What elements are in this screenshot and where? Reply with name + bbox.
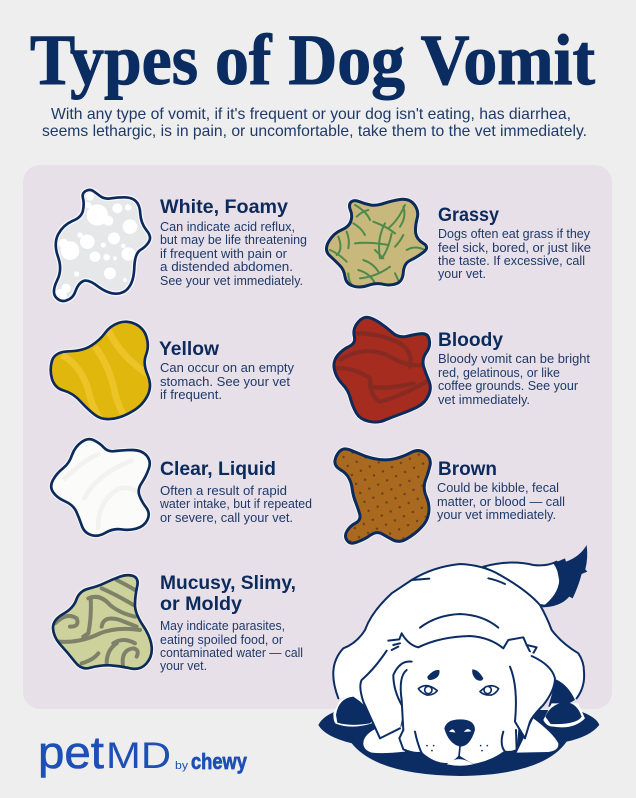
- heading: or Moldy: [160, 593, 242, 615]
- description: vet immediately.: [438, 392, 530, 407]
- description: [437, 480, 565, 522]
- item: grassy: [326, 199, 591, 287]
- description: Often a result of rapid: [160, 483, 287, 498]
- title: Types of Dog Vomit: [30, 20, 595, 100]
- left ear lines: [360, 651, 412, 738]
- heading: Yellow: [159, 338, 220, 360]
- item: brown: [335, 449, 565, 543]
- description: Can occur on an empty: [160, 360, 294, 375]
- front paws: [363, 718, 558, 753]
- nose and mouth: [444, 719, 475, 766]
- tail: [483, 545, 587, 607]
- description: eating spoiled food, or: [160, 632, 284, 647]
- heading: Clear, Liquid: [160, 458, 276, 480]
- heading: Mucusy, Slimy,: [160, 572, 296, 594]
- description: Could be kibble, fecal: [437, 480, 559, 495]
- right ear: [510, 645, 555, 738]
- description: stomach. See your vet: [160, 374, 290, 389]
- intro text: [42, 106, 587, 140]
- item: white, foamy: [54, 190, 307, 301]
- description: or severe, call your vet.: [160, 510, 293, 525]
- description: if frequent.: [160, 387, 222, 402]
- logo: petMD by chewy: chewy: [191, 749, 248, 774]
- head: [360, 633, 555, 766]
- item: clear, liquid: [51, 439, 312, 536]
- description: See your vet immediately.: [160, 273, 303, 288]
- heading: Bloody: [438, 329, 503, 351]
- icon: clear blob: [51, 439, 150, 536]
- icon: mucusy blob: [53, 575, 152, 669]
- heading: White, Foamy: [160, 196, 288, 218]
- item: yellow: [51, 322, 294, 423]
- icon: brown blob: [335, 449, 430, 543]
- description: contaminated water — call: [160, 645, 303, 660]
- eyebrows: [427, 669, 483, 681]
- ruff and head outline: [388, 633, 537, 765]
- description: if frequent with pain or: [160, 246, 288, 261]
- heading: Grassy: [438, 204, 499, 226]
- back fur lines: [412, 578, 505, 628]
- intro text: With any type of vomit, if it's frequent or your dog isn't eating, has diarrhea,: [51, 106, 571, 123]
- logo: petMD by chewy: [38, 727, 248, 778]
- description: [160, 618, 303, 673]
- description: the taste. If excessive, call: [438, 253, 585, 268]
- intro text: seems lethargic, is in pain, or uncomfortable, take them to the vet immediately.: [42, 123, 587, 140]
- heading: [160, 572, 296, 615]
- right ear lines: [510, 656, 555, 738]
- description: [438, 226, 591, 281]
- icon: grassy blob: [326, 199, 427, 287]
- description: your vet immediately.: [437, 507, 556, 522]
- right haunch shadow: [548, 679, 575, 707]
- description: coffee grounds. See your: [438, 378, 579, 393]
- eyes: [418, 686, 499, 695]
- description: [160, 219, 307, 288]
- icon: bloody blob: [333, 317, 430, 422]
- description: red, gelatinous, or like: [438, 365, 560, 380]
- description: [160, 360, 294, 402]
- icon: white foamy blob: [54, 190, 150, 301]
- description: but may be life threatening: [160, 232, 307, 247]
- body: [333, 564, 584, 698]
- back paws: [333, 695, 585, 727]
- description: Can indicate acid reflux,: [160, 219, 295, 234]
- icon: yellow blob: [51, 322, 153, 423]
- description: [438, 351, 590, 407]
- item: bloody: [333, 317, 590, 422]
- left ear: [360, 651, 404, 738]
- description: your vet.: [160, 658, 207, 673]
- shadow: [318, 710, 599, 776]
- description: May indicate parasites,: [160, 618, 285, 633]
- description: Bloody vomit can be bright: [438, 351, 590, 366]
- illustration: sad dog lying down: [318, 545, 599, 776]
- description: water intake, but if repeated: [159, 496, 312, 511]
- whisker dots: [426, 745, 488, 751]
- item: mucusy, slimy, or moldy: [53, 572, 303, 673]
- description: Dogs often eat grass if they: [438, 226, 590, 241]
- logo: petMD by chewy: MD: [106, 735, 171, 776]
- description: feel sick, bored, or just like: [438, 240, 591, 255]
- logo: petMD by chewy: by: [175, 760, 189, 772]
- description: a distended abdomen.: [160, 259, 293, 274]
- description: [159, 483, 312, 525]
- heading: Brown: [438, 458, 497, 480]
- panel: vomit types: [23, 165, 612, 709]
- description: your vet.: [438, 266, 486, 281]
- logo: petMD by chewy: pet: [38, 727, 105, 778]
- description: matter, or blood — call: [437, 494, 565, 509]
